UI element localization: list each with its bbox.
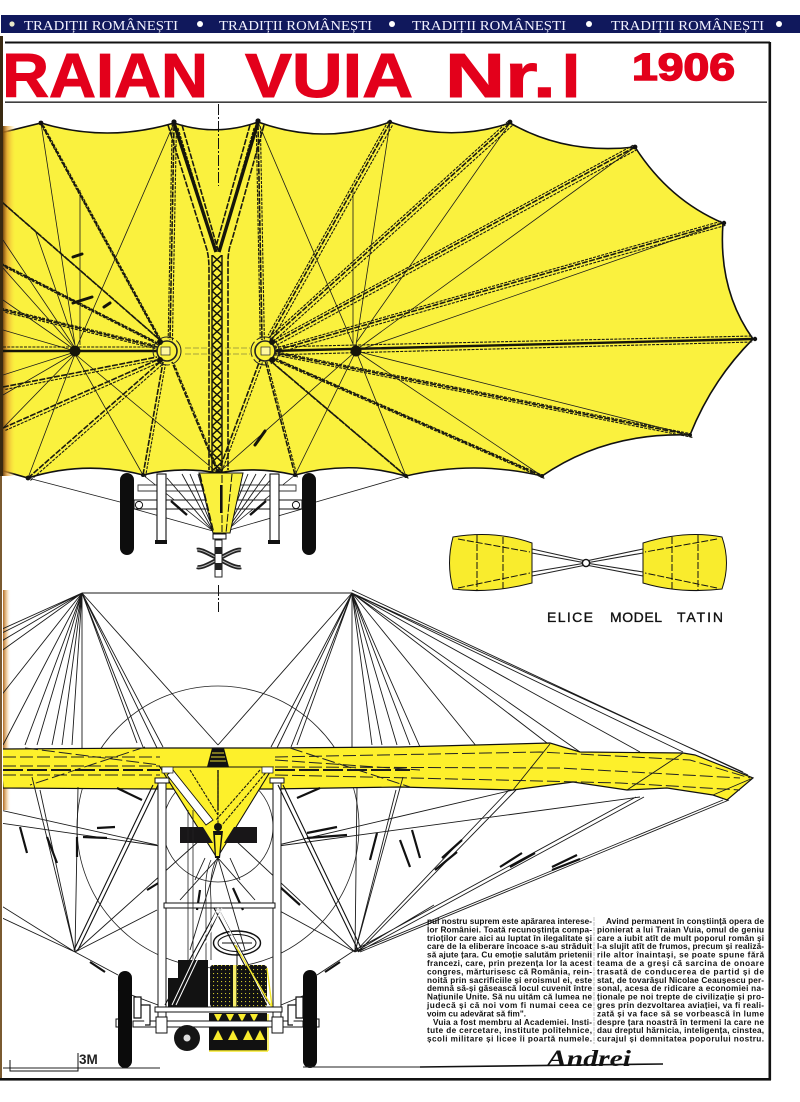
engine, lower: [168, 960, 208, 1007]
article column two: gres prin dezvoltarea aviației, va fi reali-: [597, 1001, 764, 1010]
article column two: [597, 917, 764, 1044]
article column two: zată și va face să se vorbească în lume: [597, 1009, 764, 1018]
scale bar: 3M: [79, 1052, 98, 1067]
thin bracing wires: [3, 122, 723, 478]
article column one: pul nostru suprem este apărarea interese-: [427, 917, 592, 926]
ground line: [3, 1067, 420, 1068]
article column two: despre țara noastră în termeni la care ne: [597, 1018, 764, 1027]
right wheel: [302, 473, 316, 555]
turnbuckle marks: [73, 254, 265, 445]
year: 1906: [632, 47, 735, 89]
engine block: [180, 827, 257, 843]
tail: [199, 473, 243, 533]
centre cone: [207, 748, 229, 767]
article column one: [426, 917, 592, 1044]
diagonal struts: [74, 785, 362, 1005]
article column two: care a iubit atît de mult poporul român și: [597, 934, 764, 943]
wing stays: [513, 744, 753, 795]
struts: [157, 474, 166, 542]
article column one: francezi, care, prin prezența lor la acest: [427, 959, 592, 968]
hub: [582, 559, 590, 567]
left wheel, front view: [118, 971, 132, 1068]
article column two: trasată de conducerea de partid și de: [597, 967, 764, 976]
article column two: curajul și demnitatea poporului nostru.: [597, 1035, 764, 1044]
wires to wing: [28, 475, 406, 531]
scale bar: [10, 1052, 98, 1071]
article column two: ționale pe noi trepte de civilizație și pro-: [597, 993, 764, 1002]
header band: TRADIȚII ROMÂNEȘTI: [412, 17, 566, 34]
turnbuckle cables: [20, 788, 580, 972]
article column one: noită prin sacrificiile și eroismul ei, este: [427, 976, 592, 985]
title: RAIAN: [2, 42, 208, 111]
article column two: pionierat a lui Traian Vuia, omul de geniu: [597, 925, 764, 934]
right wheel, front view: [303, 970, 317, 1068]
propeller caption: ELICE: [547, 609, 593, 625]
article column one: trioților care aici au luptat în ilegalitate și: [427, 934, 592, 943]
article column one: demnă să-și găsească locul cuvenit între: [427, 984, 592, 993]
central V frame: [160, 767, 273, 858]
plan view: landing gear and tail: [28, 473, 406, 577]
article column one: congres, mărturisesc că România, rein-: [427, 967, 592, 976]
wing tip nodes: [26, 118, 757, 480]
plan view: wing from above: [0, 118, 757, 480]
upper bracing fans: [0, 593, 352, 748]
hub rings: [70, 337, 362, 365]
double dashed ribs: [1, 121, 725, 480]
signature: Andrei: [544, 1046, 632, 1071]
left blade: [450, 535, 532, 591]
lower bracing: [0, 777, 729, 952]
wires centre: [75, 858, 355, 1005]
article column two: l-a slujit atît de frumos, precum și realiză-: [597, 942, 764, 951]
radiator: [209, 965, 272, 1051]
article column two: teama de a greși că sarcina de onoare: [597, 959, 764, 968]
header band: TRADIȚII ROMÂNEȘTI: [611, 17, 764, 34]
article column one: lor României. Toată recunoștința compa-: [427, 925, 592, 934]
propeller drawing: Tatin model: [450, 535, 726, 591]
wing dash lines: [3, 747, 750, 790]
article column one: să ajute țara. Cu emoție salutăm prietenii: [427, 951, 592, 960]
article column two: dau dreptul hărnicia, inteligența, cinstea,: [597, 1026, 764, 1035]
text block: [426, 917, 764, 1044]
propeller circles: [77, 686, 359, 968]
propeller caption: TATIN: [677, 609, 723, 625]
propeller caption: MODEL: [610, 609, 662, 625]
title: I: [562, 42, 580, 111]
title: VUIA: [245, 42, 413, 111]
article column two: Avind permanent în conștiință opera de: [606, 917, 764, 926]
axle: [134, 500, 302, 509]
lattice spine: [212, 255, 222, 473]
signature: [420, 1046, 663, 1071]
tail wheel: [174, 1025, 200, 1051]
right blade: [643, 535, 726, 591]
article column one: voim cu adevărat să fim".: [427, 1009, 526, 1018]
article column one: Vuia a fost membru al Academiei. Insti-: [433, 1018, 592, 1027]
wing, front view: [0, 743, 753, 800]
front view of the aircraft: [0, 590, 753, 1017]
left edge discolouration: [3, 126, 15, 476]
article column two: sonal, acesa de ridicare a economiei na-: [597, 984, 764, 993]
article column two: rile altor înaintași, se poate spune fără: [597, 951, 764, 960]
wing canopy: [0, 122, 753, 478]
title: Nr.: [445, 42, 556, 111]
left wheel: [120, 473, 134, 555]
article column one: care de la eliberare încoace s-au străduit: [427, 942, 592, 951]
article column one: Națiunile Unite. Să nu uităm că lumea ne: [427, 993, 592, 1002]
undercarriage: [116, 970, 319, 1068]
header band: [1, 15, 800, 34]
article column one: tute de cercetare, institute politehnice,: [427, 1026, 592, 1035]
steering wheel: [214, 931, 260, 1007]
article column two: stat, de tovarășul Nicolae Ceaușescu per-: [597, 976, 764, 985]
main frame tubes: [155, 778, 284, 1017]
main spar lines: [3, 339, 753, 351]
article column one: școli militare și licee îi poartă numele.: [427, 1035, 592, 1044]
title: [6, 54, 576, 98]
header band: TRADIȚII ROMÂNEȘTI: [219, 17, 372, 34]
header band: TRADIȚII ROMÂNEȘTI: [24, 17, 178, 34]
fan wires: [167, 474, 272, 531]
rudder / tail skid cross: [197, 540, 241, 577]
column divider: [593, 917, 595, 1044]
propeller caption: [547, 609, 723, 625]
centre line, top: [218, 104, 220, 612]
front V brace over engine: [172, 908, 268, 1005]
central V spine: [174, 122, 258, 252]
article column one: judecă și că noi vom fi numai ceea ce: [426, 1001, 592, 1010]
